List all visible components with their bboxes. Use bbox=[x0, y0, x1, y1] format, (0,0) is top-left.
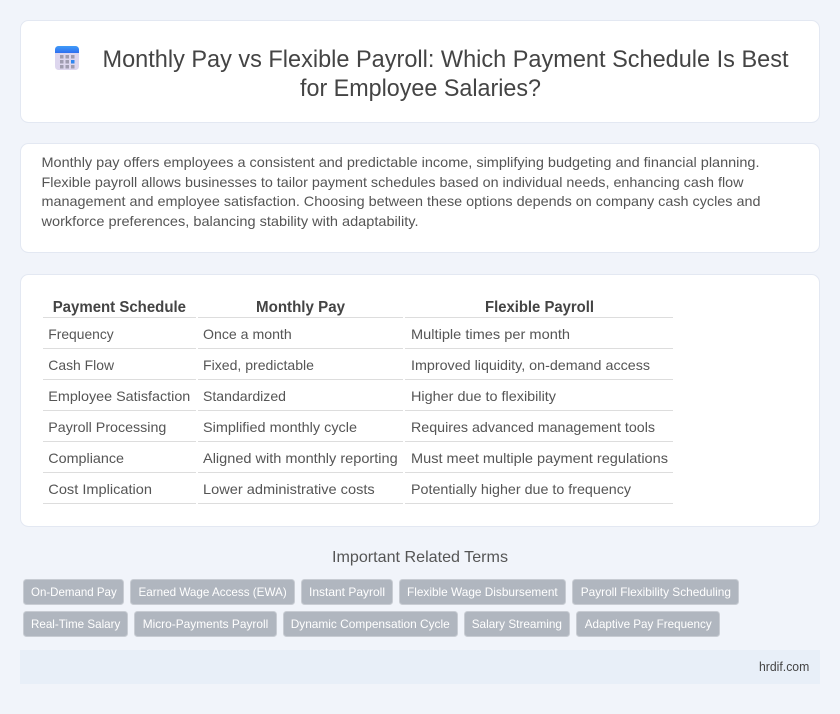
tag bbox=[400, 580, 566, 604]
tag: Salary Streaming bbox=[472, 617, 562, 631]
row: employee satisfaction bbox=[48, 388, 556, 404]
title: Monthly Pay vs Flexible Payroll: Which Payment Schedule Is Best bbox=[102, 46, 789, 73]
title: for Employee Salaries? bbox=[300, 75, 541, 102]
table header bbox=[53, 299, 594, 316]
row: payroll processing: Payroll Processing bbox=[48, 419, 166, 435]
tag: Flexible Wage Disbursement bbox=[407, 585, 558, 599]
tag bbox=[24, 580, 124, 604]
footer: hrdif.com bbox=[759, 659, 809, 674]
row: cash flow: Fixed, predictable bbox=[203, 357, 314, 373]
text block: intro bbox=[40, 154, 761, 229]
panel: intro paragraph bbox=[20, 144, 820, 252]
tag bbox=[572, 580, 738, 604]
text block: intro: Monthly pay offers employees a consistent and predictable income, simplifying budgeting and financial planning. bbox=[42, 154, 760, 170]
tag: Real-Time Salary bbox=[31, 617, 120, 631]
text block: intro: Flexible payroll allows businesses to tailor payment schedules based on individual needs, enhancing cash flow bbox=[42, 174, 744, 190]
row: cost implication: Potentially higher due to frequency bbox=[411, 481, 631, 497]
tag: Dynamic Compensation Cycle bbox=[291, 617, 450, 631]
tag: Instant Payroll bbox=[309, 585, 385, 599]
panel: header bbox=[20, 20, 820, 122]
heading: related terms: Important Related Terms bbox=[332, 549, 508, 566]
title bbox=[102, 46, 789, 102]
row: compliance: Compliance bbox=[48, 450, 124, 466]
row: frequency: Frequency bbox=[48, 326, 114, 342]
row: cost implication: Lower administrative costs bbox=[203, 481, 375, 497]
row: cash flow: Cash Flow bbox=[48, 357, 115, 373]
tags: related terms bbox=[24, 580, 738, 636]
row: cash flow: Improved liquidity, on-demand access bbox=[411, 357, 650, 373]
table header: Flexible Payroll bbox=[485, 299, 594, 316]
table row lines bbox=[43, 317, 673, 504]
row: employee satisfaction: Employee Satisfaction bbox=[48, 388, 190, 404]
row: compliance: Must meet multiple payment regulations bbox=[411, 450, 668, 466]
tag: On-Demand Pay bbox=[31, 585, 117, 599]
row: compliance: Aligned with monthly reporting bbox=[203, 450, 398, 466]
row: payroll processing: Requires advanced management tools bbox=[411, 419, 655, 435]
tag bbox=[130, 580, 294, 604]
text block: intro: management and employee satisfaction. Choosing between these options depends on company cash cycles and bbox=[42, 193, 761, 209]
tag bbox=[464, 612, 570, 636]
tag: Adaptive Pay Frequency bbox=[585, 617, 712, 631]
table header: Monthly Pay bbox=[256, 299, 345, 316]
row: cost implication bbox=[48, 481, 631, 497]
table header: Payment Schedule bbox=[53, 299, 186, 316]
icon: calendar bbox=[55, 46, 79, 70]
row: frequency: Once a month bbox=[203, 326, 292, 342]
text block: intro: workforce preferences, balancing stability with adaptability. bbox=[40, 213, 418, 229]
row: cost implication: Cost Implication bbox=[48, 481, 152, 497]
tag bbox=[134, 612, 276, 636]
row: employee satisfaction: Higher due to flexibility bbox=[411, 388, 556, 404]
row: frequency: Multiple times per month bbox=[411, 326, 570, 342]
tag: Payroll Flexibility Scheduling bbox=[581, 585, 731, 599]
row: cash flow bbox=[48, 357, 650, 373]
row: payroll processing bbox=[48, 419, 655, 435]
tag: Micro-Payments Payroll bbox=[143, 617, 268, 631]
row: employee satisfaction: Standardized bbox=[203, 388, 286, 404]
tag bbox=[302, 580, 392, 604]
row: compliance bbox=[48, 450, 668, 466]
row: payroll processing: Simplified monthly cycle bbox=[203, 419, 357, 435]
row: frequency bbox=[48, 326, 570, 342]
panel: comparison table bbox=[20, 274, 820, 526]
tag bbox=[576, 612, 720, 636]
tag: Earned Wage Access (EWA) bbox=[138, 585, 287, 599]
tag bbox=[24, 612, 128, 636]
tag bbox=[284, 612, 458, 636]
footer bbox=[20, 650, 820, 684]
